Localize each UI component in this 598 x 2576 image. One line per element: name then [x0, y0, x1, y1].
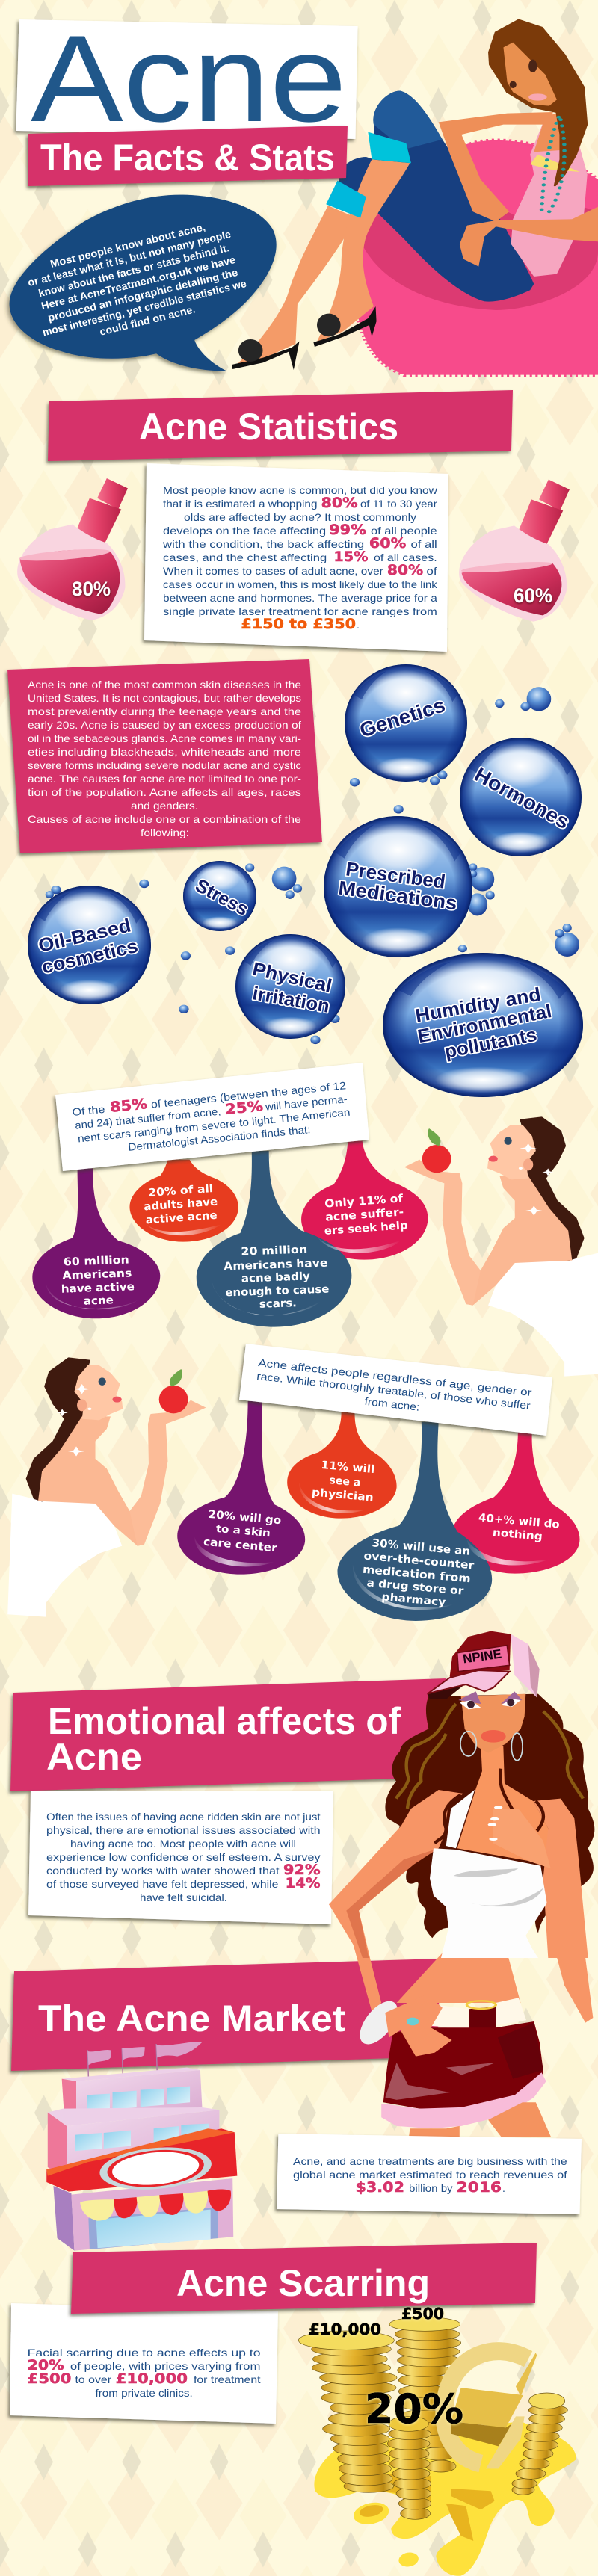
- card: acne statistics text: 60%: [369, 535, 406, 552]
- card: acne statistics text: £150 to £350: [241, 616, 356, 632]
- bubble text: Most people know about acne,: [49, 220, 206, 270]
- icon: perfume bottle 80%: 80%: [72, 578, 111, 600]
- body: [466, 1176, 572, 1306]
- card: acne statistics text: Most people know acne is common, but did you know: [163, 484, 438, 496]
- illustration: woman with apple (right): [404, 1117, 598, 1377]
- card: emotional text: Often the issues of having acne ridden skin are not just: [46, 1811, 321, 1823]
- right arm: [533, 1799, 588, 1958]
- icon: perfume bottle 60%: [459, 480, 570, 622]
- drips: treatment choices: 11% will: [321, 1460, 375, 1476]
- bubble text: most interesting, yet credible statistics we: [41, 277, 247, 338]
- card: acne statistics text: that it is estimated a whopping: [163, 498, 317, 510]
- white top: [430, 1790, 547, 1958]
- icon: perfume bottle 80%: [17, 478, 128, 620]
- puddle reflections: [342, 2471, 495, 2541]
- drip: purple: [32, 1168, 160, 1318]
- heading: The Acne Market: [11, 1959, 440, 2071]
- drips: American acne facts: active acne: [145, 1210, 218, 1226]
- panel: what acne is: most prevalently during the teenage years and the: [28, 705, 301, 717]
- coin stack: left tall: [298, 2331, 397, 2492]
- card: teenagers text: 25%: [224, 1098, 264, 1118]
- bubble: Physical irritation: Physical: [250, 958, 334, 997]
- heading: Emotional affects of Acne: Emotional affects of: [48, 1700, 401, 1742]
- drips: treatment choices: see a: [329, 1474, 361, 1489]
- card: acne statistics text: of: [426, 565, 437, 577]
- card: scarring text: of people, with prices varying from: [70, 2360, 261, 2372]
- panel: what acne is: following:: [141, 827, 189, 838]
- bubble: Prescribed Medications: Medications: [337, 877, 458, 915]
- drips: treatment choices: a drug store or: [366, 1577, 465, 1598]
- bubble: Stress: Stress: [192, 875, 252, 920]
- drips: American acne facts: [32, 1141, 428, 1327]
- drip: orange: [287, 1412, 397, 1519]
- drips: treatment choices: over-the-counter: [363, 1551, 475, 1572]
- card: emotional text: [28, 1791, 333, 1924]
- heading: Emotional affects of Acne: Acne: [46, 1736, 142, 1778]
- drips: American acne facts: 60 million: [64, 1254, 129, 1269]
- bubble shape: [10, 195, 277, 371]
- card background: [16, 19, 358, 139]
- red shop sign: [46, 2128, 237, 2195]
- card: emotional text: physical, there are emotional issues associated with: [46, 1824, 321, 1836]
- illustration: shop building: [46, 2042, 237, 2251]
- drips: treatment choices: care center: [203, 1536, 278, 1554]
- drips: treatment choices: 20% will go: [208, 1509, 282, 1527]
- bubble text: Here at AcneTreatment.org.uk we have: [40, 253, 237, 312]
- hair over chest: [435, 1769, 543, 1844]
- apple: [422, 1128, 451, 1173]
- bubble: Stress: [183, 861, 256, 931]
- bubble: Prescribed Medications: [324, 816, 472, 957]
- drips: American acne facts: have active: [61, 1281, 135, 1296]
- ground floor: [53, 2178, 233, 2251]
- card: market text: global acne market estimated to reach revenues of: [293, 2169, 567, 2181]
- upper floor: [62, 2068, 202, 2119]
- card: market text: billion by: [409, 2182, 453, 2194]
- drip: purple: [177, 1401, 305, 1575]
- card: teenagers text: Of the: [72, 1103, 105, 1118]
- card: emotional text: have felt suicidal.: [140, 1891, 227, 1903]
- drips: American acne facts: scars.: [259, 1297, 297, 1311]
- bubble: Physical irritation: irritation: [251, 983, 331, 1017]
- heading: Acne Scarring: Acne Scarring: [176, 2262, 430, 2304]
- drips: American acne facts: Americans have: [224, 1258, 328, 1273]
- drips: American acne facts: ers seek help: [324, 1220, 408, 1238]
- bubble: Genetics: Genetics: [357, 694, 448, 742]
- drips: treatment choices: 40+% will do: [478, 1512, 560, 1531]
- long wavy hair: [385, 1694, 594, 1938]
- drip: slate: [197, 1151, 351, 1327]
- card: regardless of age text: [239, 1344, 552, 1436]
- icon: perfume bottle 60%: 60%: [514, 584, 552, 607]
- card: acne statistics text: cases, and the chest affecting: [163, 552, 327, 563]
- card: regardless of age text: race. While thoroughly treatable, of those who suffer: [256, 1370, 531, 1412]
- card: acne statistics text: olds are affected by acne? It most commonly: [184, 511, 416, 523]
- illustration: woman in cap and skirt, lower body: [352, 1943, 593, 2137]
- bubble: Oil-Based cosmetics: Oil-Based: [37, 915, 133, 957]
- panel: what acne is: acne. The causes for acne are not limited to one por-: [28, 773, 301, 785]
- card: acne statistics text: 80%: [321, 495, 358, 511]
- belt: [419, 1998, 526, 2030]
- bubble: Physical irritation: [235, 934, 345, 1039]
- bead necklace: [541, 117, 564, 211]
- drips: American acne facts: acne suffer-: [325, 1206, 404, 1224]
- drip: orange: [129, 1160, 238, 1242]
- card: market text: $3.02: [356, 2179, 404, 2196]
- heading: Emotional affects of Acne: [10, 1678, 446, 1791]
- bubble: Oil-Based cosmetics: cosmetics: [40, 936, 140, 978]
- drips: treatment choices: medication from: [362, 1564, 471, 1585]
- drips: treatment choices: nothing: [492, 1527, 543, 1543]
- face: [458, 1691, 525, 1753]
- panel: what acne is: Causes of acne include one or a combination of the: [28, 813, 301, 825]
- panel: what acne is: Acne is one of the most common skin diseases in the: [28, 679, 301, 691]
- illustration: gold coins and pound symbol: 20%: [365, 2385, 463, 2433]
- card: emotional text: 14%: [286, 1875, 321, 1891]
- drips: treatment choices: [177, 1401, 580, 1621]
- card: market text: .: [502, 2182, 505, 2194]
- subtitle banner: The Facts & Stats: [40, 137, 335, 179]
- drips: American acne facts: adults have: [144, 1196, 218, 1213]
- bubble: Humidity and Environmental pollutants: Environmental: [416, 1001, 553, 1047]
- card: acne statistics text: with the condition, the back affecting: [162, 538, 364, 550]
- card: market text: [277, 2134, 582, 2214]
- coin labels: £10,000: [309, 2320, 381, 2338]
- pink fur chair: [346, 140, 598, 375]
- speech bubble intro: [10, 195, 277, 371]
- bubble text: produced an infographic detailing the: [46, 266, 239, 324]
- heeled shoes with flowers: [232, 306, 377, 370]
- card: emotional text: experience low confidence or self esteem. A survey: [46, 1851, 321, 1863]
- coin stack: right: [512, 2393, 567, 2495]
- card: market text: 2016: [457, 2179, 502, 2196]
- drips: American acne facts: 20 million: [241, 1244, 308, 1258]
- bubble: Hormones: [460, 738, 582, 856]
- title: Acne: Acne: [31, 10, 347, 147]
- card: market text: Acne, and acne treatments are big business with the: [293, 2155, 567, 2167]
- card: acne statistics text: 99%: [329, 522, 366, 538]
- card: scarring text: 20%: [28, 2357, 64, 2373]
- bubble: Humidity and Environmental pollutants: Humidity and: [413, 984, 543, 1027]
- panel: what acne is: tion of the population. Acne affects all ages, races: [28, 786, 301, 798]
- coin stack: back: [389, 2317, 461, 2472]
- card: scarring text: from private clinics.: [96, 2387, 193, 2399]
- card: scarring text: to over: [75, 2373, 111, 2385]
- panel: what acne is: severe forms including severe nodular acne and cystic: [28, 759, 301, 771]
- hand on chest: [488, 1806, 551, 1868]
- heading: Acne Statistics: [48, 390, 513, 461]
- torso and arms: [439, 112, 598, 277]
- gold puddle: [314, 2421, 576, 2576]
- card: acne statistics text: between acne and hormones. The average price for a: [163, 592, 437, 604]
- card: acne statistics text: 15%: [333, 549, 368, 565]
- small water droplets: [46, 687, 579, 1044]
- bubble text: [23, 214, 250, 351]
- card: emotional text: having acne too. Most people with acne will: [70, 1838, 296, 1850]
- card: teenagers text: will have perma-: [264, 1093, 348, 1113]
- drips: American acne facts: Only 11% of: [324, 1193, 404, 1211]
- legs: [409, 2102, 551, 2137]
- dress: [488, 1253, 598, 1377]
- card: acne statistics text: When it comes to cases of adult acne, over: [163, 565, 383, 577]
- white glove cuff: [352, 1998, 405, 2048]
- subtitle banner: [28, 126, 348, 186]
- big pound sculpture: [444, 2351, 537, 2468]
- card: regardless of age text: from acne:: [364, 1395, 420, 1413]
- chest and neck: [457, 1746, 551, 1868]
- card: acne statistics text: develops on the face affecting: [163, 525, 326, 537]
- bubble: Oil-Based cosmetics: [28, 886, 151, 1004]
- arm and hand: [404, 1160, 481, 1306]
- drips: treatment choices: to a skin: [215, 1523, 271, 1539]
- card: acne statistics text: of 11 to 30 year: [360, 498, 437, 510]
- drip: crimson: [301, 1141, 428, 1260]
- hair and face: [490, 20, 587, 185]
- card: teenagers text: and 24) that suffer from acne,: [74, 1105, 221, 1131]
- card: teenagers text: nent scars ranging from severe to light. The American: [77, 1106, 351, 1144]
- arm with elbow: [329, 1790, 463, 1958]
- cap logo text: NPINE: [462, 1646, 502, 1667]
- card: acne statistics text: of all people: [371, 525, 437, 537]
- bubble text: know about the facts or stats behind it.: [37, 241, 230, 299]
- panel: what acne is: early 20s. Acne is caused by an excess production of: [28, 719, 301, 731]
- face: [487, 1125, 536, 1179]
- card: teenagers text: Dermatologist Association finds that:: [128, 1123, 311, 1153]
- drips: American acne facts: enough to cause: [225, 1284, 330, 1299]
- drips: American acne facts: acne badly: [241, 1270, 311, 1285]
- panel: what acne is: and genders.: [131, 800, 198, 812]
- illustration: woman with apple (left): [7, 1358, 206, 1617]
- drips: treatment choices: physician: [311, 1486, 374, 1504]
- awning: [80, 2189, 231, 2221]
- drips: American acne facts: 20% of all: [148, 1183, 214, 1199]
- card: scarring text: £500: [28, 2370, 71, 2387]
- card: emotional text: 92%: [283, 1862, 321, 1878]
- golden hair strands: [396, 1704, 583, 1809]
- card: acne statistics text: of all: [411, 538, 437, 550]
- drip: slate: [338, 1422, 492, 1621]
- card: acne statistics text: 80%: [387, 562, 423, 578]
- drips: treatment choices: pharmacy: [381, 1591, 446, 1609]
- drips: treatment choices: 30% will use an: [372, 1537, 471, 1558]
- bubble text: or at least what it is, but not many people: [26, 228, 232, 288]
- hand and ring: [385, 1994, 452, 2057]
- sparkles: [520, 1143, 554, 1216]
- panel: what acne is: eties including blackheads, whiteheads and more: [28, 746, 301, 758]
- baseball cap: [428, 1631, 540, 1699]
- heading text: The Acne Market: The Acne Market: [38, 1998, 345, 2039]
- card: acne statistics text: .: [357, 619, 360, 631]
- drips: American acne facts: Americans: [62, 1267, 132, 1282]
- coin stack: front: [387, 2416, 431, 2519]
- panel: what acne is: [7, 659, 322, 853]
- card: emotional text: conducted by works with water showed that: [46, 1865, 280, 1877]
- heading: Acne Scarring: [71, 2243, 537, 2314]
- card: acne statistics text: cases occur in women, this is most likely due to the link: [163, 578, 438, 590]
- skirt: [381, 2021, 546, 2128]
- heading: Acne Statistics: Acne Statistics: [139, 406, 398, 448]
- flags: [87, 2042, 202, 2078]
- card: acne statistics text: single private laser treatment for acne ranges from: [163, 605, 437, 617]
- drips: American acne facts: acne: [84, 1294, 114, 1308]
- illustration: woman on pink chair: [232, 20, 598, 375]
- bubble text: could find on acne.: [99, 303, 197, 338]
- card: acne statistics text: [144, 463, 449, 652]
- middle floor: [48, 2107, 219, 2180]
- illustration: gold coins and pound symbol: £500: [401, 2305, 444, 2323]
- card: emotional text: of those surveyed have felt depressed, while: [46, 1878, 279, 1890]
- panel: what acne is: oil in the sebaceous glands. Acne comes in many vari-: [28, 732, 301, 744]
- card: scarring text: £10,000: [116, 2370, 188, 2387]
- card: teenagers text: 85%: [109, 1096, 148, 1116]
- panel: what acne is: United States. It is not contagious, but rather develops: [28, 692, 301, 704]
- illustration: gold coins and pound symbol: [298, 2305, 576, 2576]
- card: scarring text: [10, 2303, 278, 2424]
- card: scarring text: Facial scarring due to acne effects up to: [28, 2347, 261, 2359]
- card: scarring text: for treatment: [194, 2373, 261, 2385]
- illustration: woman in cap and skirt, upper body: [329, 1631, 594, 1958]
- card: teenagers text: [55, 1063, 369, 1171]
- drip: crimson: [452, 1433, 580, 1574]
- bubble: Humidity and Environmental pollutants: pollutants: [443, 1024, 538, 1063]
- bubble: Humidity and Environmental pollutants: [383, 953, 583, 1097]
- bubble: Prescribed Medications: Prescribed: [345, 857, 447, 893]
- hoop earrings: [460, 1732, 523, 1761]
- bubble: Genetics: [345, 664, 467, 782]
- bubble: Hormones: Hormones: [471, 763, 573, 833]
- hair: [520, 1117, 584, 1261]
- lower arms and waist: [353, 1943, 593, 2023]
- card: acne statistics text: of all cases.: [374, 552, 437, 563]
- card: regardless of age text: Acne affects people regardless of age, gender or: [258, 1356, 533, 1398]
- card: teenagers text: of teenagers (between the ages of 12: [150, 1079, 347, 1111]
- legs and jeans: [232, 91, 534, 368]
- title card: [16, 10, 358, 147]
